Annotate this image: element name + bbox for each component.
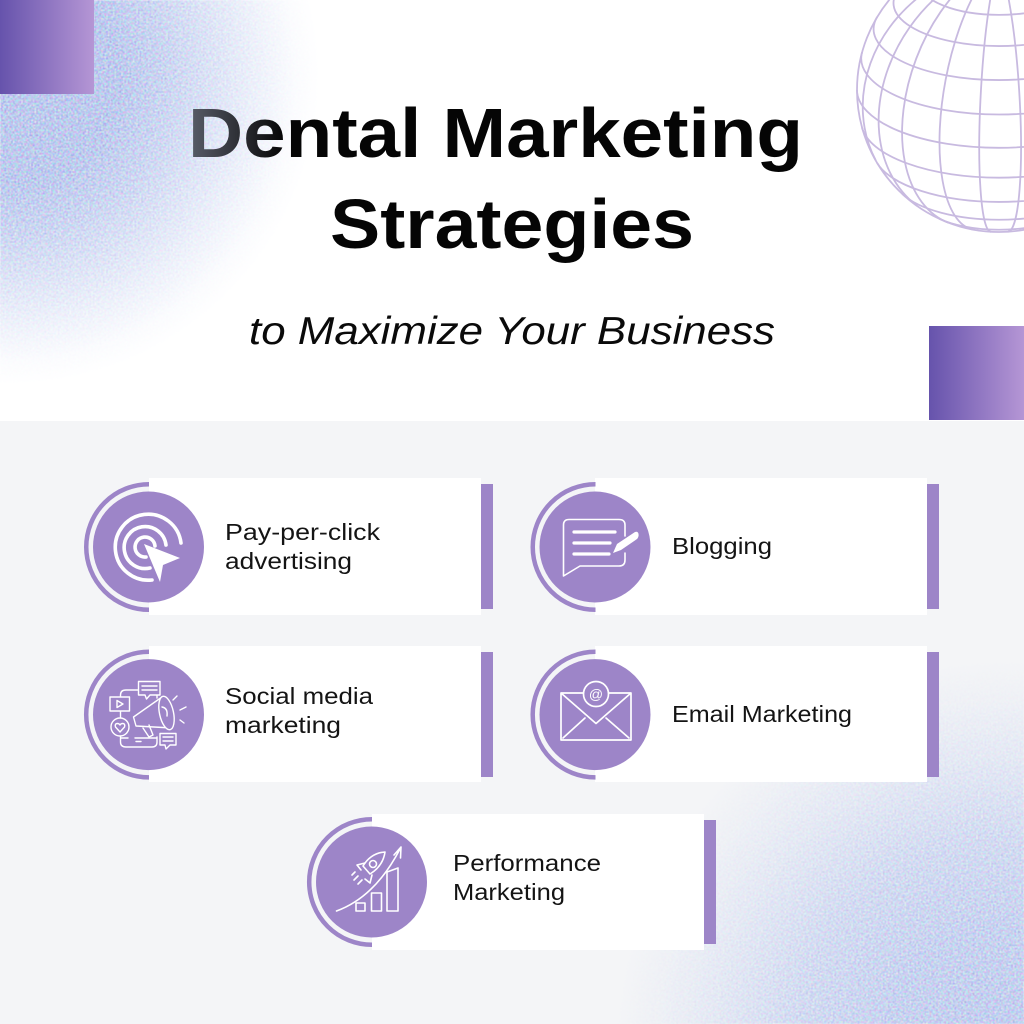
card: blogging xyxy=(533,478,939,615)
label: pay-per-click advertising: Pay-per-click xyxy=(225,519,381,545)
label: pay-per-click advertising xyxy=(225,519,381,574)
card: social media marketing xyxy=(86,646,493,782)
title: Strategies xyxy=(330,185,694,263)
gradient square right xyxy=(929,326,1024,420)
gradient square top left xyxy=(0,0,94,94)
label: performance marketing xyxy=(453,850,601,905)
title: Dental Marketing xyxy=(188,94,803,172)
card: email marketing xyxy=(533,646,939,782)
subtitle: to Maximize Your Business xyxy=(249,310,775,353)
wireframe globe xyxy=(857,0,1024,232)
label: blogging: Blogging xyxy=(672,533,772,559)
icon: target with cursor xyxy=(115,514,181,582)
icon: envelope with at sign xyxy=(561,682,631,740)
icon: social media megaphone xyxy=(110,682,186,749)
label: pay-per-click advertising: advertising xyxy=(225,548,352,574)
card: performance marketing xyxy=(309,814,716,950)
grainy gradient top left xyxy=(0,0,290,354)
background: white top section xyxy=(0,0,1024,421)
label: email marketing: Email Marketing xyxy=(672,701,852,727)
title xyxy=(188,94,803,263)
label: performance marketing: Performance xyxy=(453,850,601,876)
label: social media marketing xyxy=(225,683,373,738)
icon: envelope with at sign: @ xyxy=(589,686,603,702)
background: light grey lower panel xyxy=(0,421,1024,1024)
icon: speech bubble with pen xyxy=(564,520,639,576)
card: pay-per-click advertising xyxy=(86,478,493,615)
icon: rocket and growth chart xyxy=(336,847,401,911)
label: performance marketing: Marketing xyxy=(453,879,565,905)
label: social media marketing: marketing xyxy=(225,712,341,738)
label: social media marketing: Social media xyxy=(225,683,373,709)
grainy gradient bottom right xyxy=(656,700,1024,1024)
